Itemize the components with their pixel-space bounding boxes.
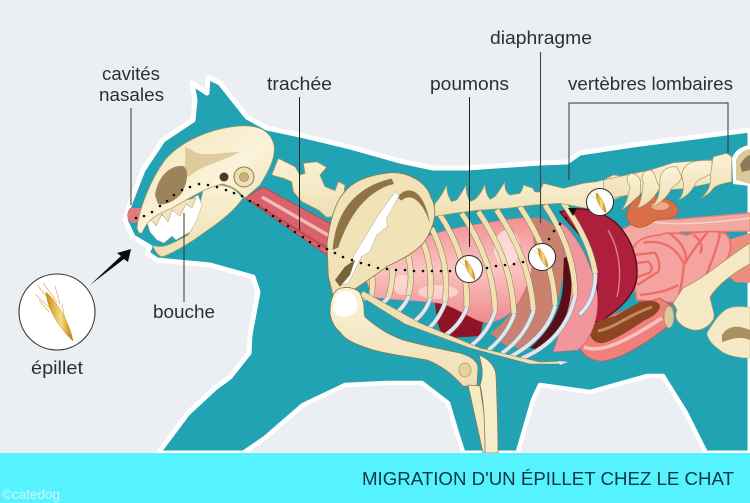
lower dark lobe: [433, 290, 483, 338]
label: cavités: cavités: [102, 64, 160, 84]
scapula: [327, 173, 435, 297]
leader line: cavités nasales: [130, 108, 132, 205]
cartilage: [365, 275, 595, 358]
colon: [620, 213, 750, 247]
teeth: [147, 195, 202, 243]
organs: [363, 195, 750, 361]
femur: [673, 243, 750, 330]
migration path dots: [135, 183, 567, 272]
neck vertebrae: [272, 158, 345, 217]
black triangle on spine: [568, 208, 577, 216]
leader line: trachée: [298, 97, 300, 230]
band title: MIGRATION D'UN ÉPILLET CHEZ LE CHAT: [362, 469, 734, 489]
liver: [490, 217, 564, 350]
hind leg bones: [664, 243, 750, 358]
spikelet marker: diaphragm: [528, 243, 556, 270]
upper teeth: [144, 198, 196, 228]
kidney: [627, 195, 678, 227]
dark cavity: [530, 255, 571, 350]
nose cavity: [127, 208, 144, 223]
leader line: poumons: [468, 97, 470, 247]
lumbar vertebrae: [603, 153, 732, 210]
dark red organ: [560, 209, 637, 322]
sternum: [360, 291, 568, 365]
pelvis: [707, 307, 750, 358]
rib bones: [372, 203, 595, 313]
label: nasales: nasales: [99, 85, 164, 105]
thoracic spine: [433, 175, 622, 217]
humerus: [330, 287, 478, 387]
acromion cavity: [335, 260, 355, 287]
copyright: ©catedog: [2, 486, 60, 502]
label: vertèbres lombaires: vertèbres lombaires: [568, 74, 733, 94]
ear canal: [234, 167, 254, 187]
label: diaphragme: diaphragme: [490, 28, 592, 48]
spikelet large circle: [19, 274, 95, 350]
lungs: [363, 217, 534, 323]
auditory hole: [220, 172, 228, 182]
lower intestine: [578, 298, 674, 361]
bottom band: [0, 453, 750, 503]
label: poumons: poumons: [430, 74, 509, 94]
bracket: vertèbres lombaires: [569, 103, 728, 180]
diaphragm pink: [553, 222, 598, 352]
eye socket: [155, 166, 187, 204]
leader line: diaphragme: [540, 52, 542, 223]
brow shading: [185, 147, 240, 178]
label: bouche: bouche: [153, 302, 215, 322]
left fossa rim: [333, 179, 394, 250]
leader line: bouche: [183, 213, 185, 302]
cranium: [137, 126, 274, 233]
cat silhouette: [125, 77, 750, 455]
spine ridge: [340, 192, 399, 285]
intestines: [633, 232, 731, 303]
pelvis top: [732, 145, 750, 186]
label: épillet: épillet: [31, 358, 83, 378]
label: trachée: trachée: [267, 74, 332, 94]
mandible: [153, 185, 243, 257]
arrow: [90, 249, 131, 285]
ribs: [365, 203, 595, 358]
patella: [664, 306, 674, 328]
skull: [137, 126, 274, 257]
brown organ: [590, 301, 660, 343]
spikelet marker: lungs: [456, 255, 482, 282]
spikelet marker: lumbar: [586, 188, 614, 216]
trachea: [245, 187, 335, 261]
right intestine: [722, 233, 750, 283]
right fossa rim: [397, 190, 430, 223]
radius and ulna: [468, 355, 498, 453]
